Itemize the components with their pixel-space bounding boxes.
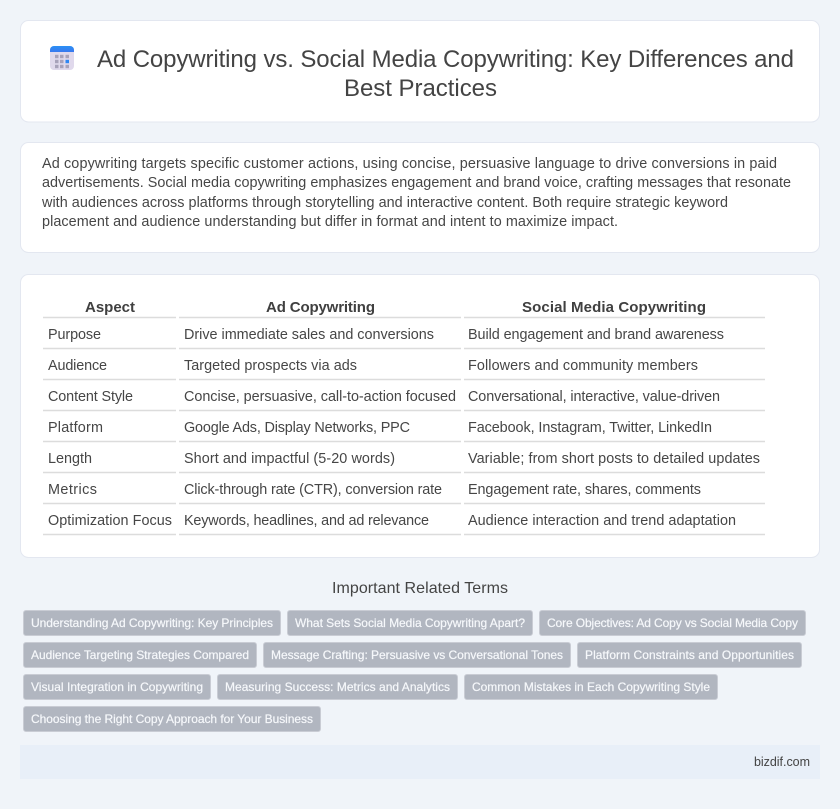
tag [24, 706, 320, 732]
tag [218, 674, 458, 700]
row: purpose: Drive immediate sales and conversions [184, 327, 434, 343]
text block: introduction paragraph [41, 156, 791, 230]
row: metrics: Engagement rate, shares, comments [468, 482, 701, 498]
panel: introduction [20, 142, 820, 252]
row: content style: Conversational, interactive, value-driven [468, 389, 720, 405]
panel: comparison table [20, 274, 820, 558]
row: platform [48, 420, 712, 436]
text block: introduction paragraph: placement and audience understanding but differ in format and intent to maximize impact. [42, 214, 618, 230]
row: platform: Google Ads, Display Networks, PPC [184, 420, 410, 436]
row: content style [48, 389, 720, 405]
row: purpose: Build engagement and brand awareness [468, 327, 724, 343]
row: metrics: Metrics [48, 482, 97, 498]
title [97, 46, 794, 102]
text block: introduction paragraph: advertisements. Social media copywriting emphasizes engagement and brand voice, crafting messages that resonate [42, 175, 791, 191]
text block: introduction paragraph: Ad copywriting targets specific customer actions, using concise, persuasive language to drive conversions in paid [42, 156, 777, 172]
table header: Aspect [85, 299, 135, 316]
tag: What Sets Social Media Copywriting Apart? [295, 616, 525, 630]
tag: Measuring Success: Metrics and Analytics [225, 680, 450, 694]
table header: Ad Copywriting [266, 299, 375, 316]
row: length: Variable; from short posts to detailed updates [468, 451, 760, 467]
tag: Understanding Ad Copywriting: Key Principles [31, 616, 273, 630]
icon: calendar [50, 46, 74, 70]
related terms tags [24, 610, 806, 732]
heading: important related terms: Important Related Terms [332, 580, 508, 597]
tag: Common Mistakes in Each Copywriting Style [472, 680, 710, 694]
row: purpose: Purpose [48, 327, 101, 343]
tag [24, 610, 280, 636]
tag [578, 642, 802, 668]
row: content style: Concise, persuasive, call-to-action focused [184, 389, 456, 405]
title: Best Practices [344, 75, 497, 102]
row: audience: Followers and community members [468, 358, 698, 374]
panel: title card [20, 20, 820, 122]
table header: Social Media Copywriting [522, 299, 706, 316]
row: content style: Content Style [48, 389, 133, 405]
row: platform: Facebook, Instagram, Twitter, LinkedIn [468, 420, 712, 436]
footer [20, 745, 820, 779]
row: length: Short and impactful (5-20 words) [184, 451, 395, 467]
row: metrics [48, 482, 701, 498]
tag [464, 674, 718, 700]
footer: bizdif.com [754, 755, 810, 769]
row: optimization focus: Optimization Focus [48, 513, 172, 529]
row: platform: Platform [48, 420, 103, 436]
tag: Message Crafting: Persuasive vs Conversational Tones [271, 648, 563, 662]
row: length: Length [48, 451, 92, 467]
row: audience: Audience [48, 358, 107, 374]
row: audience [48, 358, 698, 374]
tag: Platform Constraints and Opportunities [585, 648, 794, 662]
tag [24, 642, 256, 668]
tag [24, 674, 210, 700]
row: length [48, 451, 760, 467]
row: optimization focus [48, 513, 736, 529]
row: audience: Targeted prospects via ads [184, 358, 357, 374]
tag: Choosing the Right Copy Approach for Your Business [31, 712, 313, 726]
tag [264, 642, 570, 668]
tag [540, 610, 806, 636]
tag: Visual Integration in Copywriting [31, 680, 203, 694]
row: optimization focus: Keywords, headlines, and ad relevance [184, 513, 429, 529]
row: metrics: Click-through rate (CTR), conversion rate [184, 482, 442, 498]
row: optimization focus: Audience interaction and trend adaptation [468, 513, 736, 529]
tag: Audience Targeting Strategies Compared [31, 648, 249, 662]
tag [288, 610, 532, 636]
row: purpose [48, 327, 724, 343]
tag: Core Objectives: Ad Copy vs Social Media Copy [547, 616, 798, 630]
table header [85, 299, 706, 316]
title: Ad Copywriting vs. Social Media Copywriting: Key Differences and [97, 46, 794, 73]
text block: introduction paragraph: with audiences across platforms through storytelling and interactive content. Both require strategic keyword [41, 195, 728, 211]
